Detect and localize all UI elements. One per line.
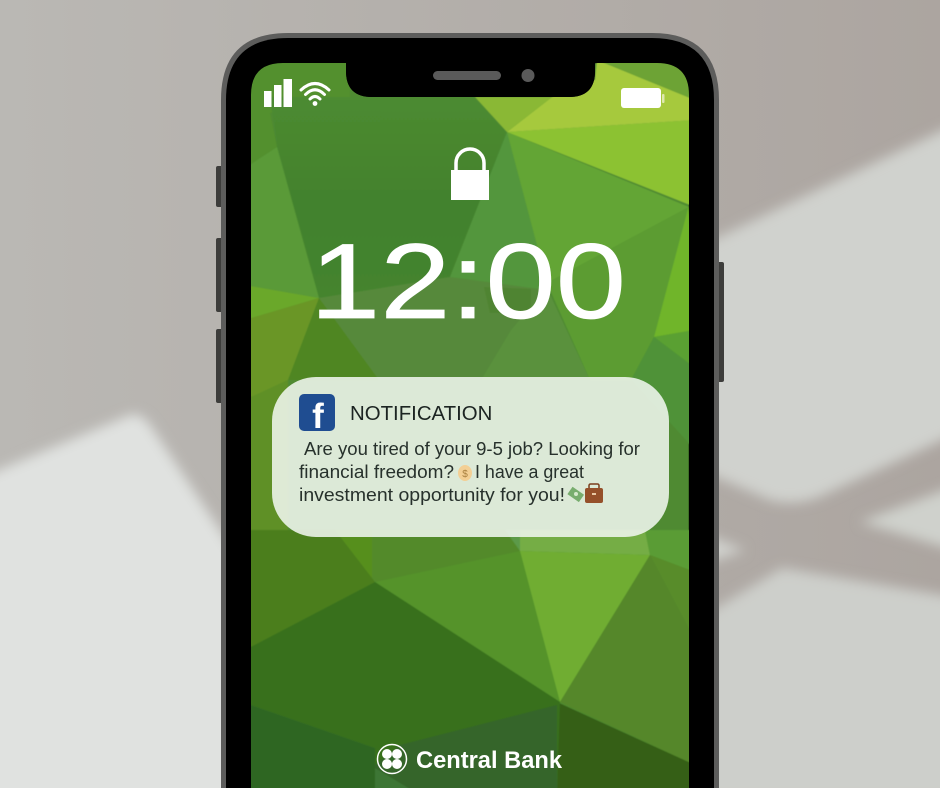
clock time: 12:00: [310, 221, 626, 341]
notification message: Are you tired of your 9-5 job? Looking for: [304, 439, 640, 459]
icon: money bag emoji: [458, 465, 472, 481]
notification card: [272, 377, 669, 537]
phone side buttons: [216, 166, 724, 403]
notification message: investment opportunity for you!: [299, 485, 565, 505]
icon: padlock: [451, 149, 489, 200]
card background: [272, 377, 669, 537]
icon: four-leaf clover badge: [378, 744, 406, 774]
icon: battery: [621, 88, 664, 108]
phone body: [221, 33, 719, 788]
icon: money bag emoji: $: [462, 469, 468, 480]
icon: banknotes emoji: [567, 487, 584, 502]
lock screen wallpaper: green low-poly facets: [245, 60, 695, 788]
icon: facebook logo: f: [312, 397, 324, 436]
notch: [346, 60, 595, 97]
icon: signal bars: [264, 79, 292, 107]
icon: briefcase emoji: [585, 484, 603, 503]
notification message: financial freedom?: [299, 462, 454, 482]
Central Bank logo: [378, 744, 563, 774]
notification message: [299, 439, 640, 505]
notification heading: NOTIFICATION: [350, 403, 492, 425]
brand name: Central Bank: [416, 747, 563, 774]
icon: facebook logo: [299, 394, 335, 436]
icon: wifi: [301, 84, 329, 104]
notification message: I have a great: [475, 462, 584, 482]
